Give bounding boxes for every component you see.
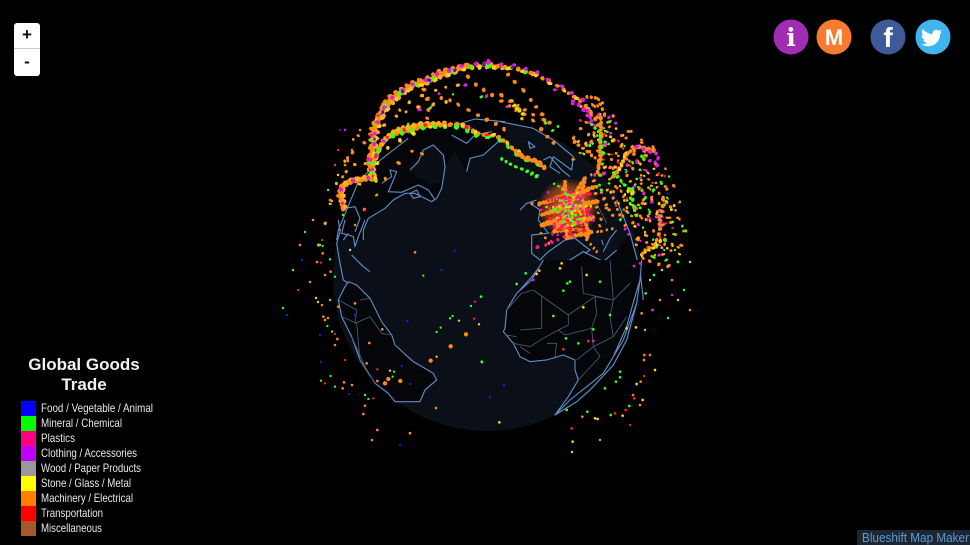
icon: info	[774, 20, 808, 54]
legend	[21, 355, 153, 536]
legend item: transportation: Transportation	[41, 506, 103, 520]
zoom panel	[14, 23, 40, 76]
legend item: clothing: Clothing / Accessories	[41, 446, 137, 460]
legend item: stone: Stone / Glass / Metal	[41, 476, 131, 490]
dots: mid-latitude routes	[318, 75, 590, 245]
dots: Russia and Asia scatter	[573, 98, 688, 268]
continent: Europe and northern Asia	[500, 122, 573, 177]
zoom out button: -	[24, 52, 30, 71]
legend item: wood: Wood / Paper Products	[41, 461, 141, 475]
legend item: machinery: Machinery / Electrical	[41, 491, 133, 505]
dots: outer halo	[283, 130, 690, 452]
zoom controls	[14, 23, 40, 76]
Europe hub glow	[537, 178, 599, 238]
dots: Asian route streaks	[500, 98, 663, 257]
legend item: stone	[21, 476, 131, 491]
legend item: miscellaneous: Miscellaneous	[41, 521, 102, 535]
legend item: miscellaneous	[21, 521, 102, 536]
legend item: machinery	[21, 491, 133, 506]
legend item: clothing	[21, 446, 137, 461]
sparse trade dots	[283, 130, 690, 452]
zoom in button: +	[22, 25, 32, 44]
dots: Arctic route outer arc	[368, 63, 603, 180]
legend item: wood	[21, 461, 141, 476]
legend title: Global Goods	[28, 355, 140, 374]
continent: Africa	[503, 260, 642, 415]
dots: Europe hub	[532, 177, 615, 253]
dots: Europe and Asia trade cluster	[500, 98, 688, 268]
dense trade dots	[318, 63, 688, 268]
legend item: mineral: Mineral / Chemical	[41, 416, 122, 430]
legend item: food	[21, 401, 153, 416]
legend item: mineral	[21, 416, 122, 431]
continent: Mediterranean region	[520, 200, 643, 300]
globe sphere	[333, 123, 641, 431]
icon: facebook: f	[883, 22, 893, 53]
icon: facebook	[870, 20, 906, 54]
icon buttons	[774, 20, 950, 54]
legend item: food: Food / Vegetable / Animal	[41, 401, 153, 415]
dots: Atlantic and South America	[321, 246, 482, 433]
legend item: plastics: Plastics	[41, 431, 75, 445]
icon: twitter	[916, 20, 950, 54]
legend item: transportation	[21, 506, 103, 521]
globe	[333, 119, 643, 431]
dots: Arctic route inner arc	[341, 123, 545, 208]
legend title: Trade	[61, 375, 107, 394]
continent: North America and Greenland	[337, 119, 505, 240]
dots: Africa and South Atlantic	[481, 263, 655, 442]
icon: M: M	[825, 25, 843, 50]
continent: Central and South America	[337, 220, 437, 402]
icon: info: i	[786, 23, 796, 52]
icon: M	[816, 20, 852, 54]
legend item: plastics	[21, 431, 75, 446]
